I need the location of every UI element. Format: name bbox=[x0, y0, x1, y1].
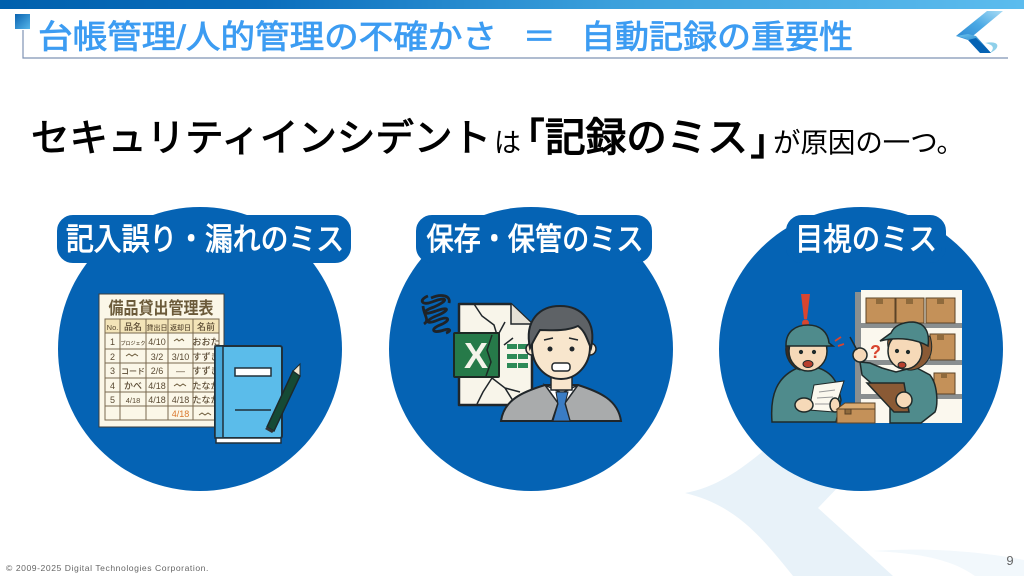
icon: ledger sheet: 貸出日 bbox=[146, 323, 168, 332]
icon: surprise ticks bbox=[835, 337, 844, 346]
icon: worker with clipboard bbox=[850, 322, 937, 423]
label: visual check errors: 目視のミス bbox=[795, 222, 937, 257]
icon: excel badge bbox=[454, 333, 499, 377]
icon: ledger sheet: たなか bbox=[192, 395, 220, 405]
icon: ledger sheet bbox=[99, 294, 224, 427]
headline: セキュリティインシデント bbox=[31, 117, 491, 160]
label: storage errors: 保存・保管のミス bbox=[426, 222, 644, 257]
icon: ledger sheet: 4 bbox=[110, 381, 115, 391]
icon: ledger sheet: 3 bbox=[110, 366, 115, 376]
icon: exclamation mark bbox=[801, 294, 810, 326]
icon: ledger sheet: かべ bbox=[124, 381, 142, 391]
panel: entry errors bbox=[58, 207, 349, 491]
icon: ledger sheet: No. bbox=[107, 323, 118, 332]
icon: pencil bbox=[265, 364, 300, 433]
icon: ledger sheet: ― bbox=[176, 366, 185, 376]
title equation: ＝ bbox=[523, 19, 556, 55]
icon: ledger sheet: 名前 bbox=[197, 321, 215, 332]
icon: ledger sheet: 4/18 bbox=[172, 395, 189, 405]
circle background bbox=[58, 207, 342, 491]
title frame rule bbox=[23, 30, 1008, 58]
icon: question marks: ? bbox=[870, 342, 881, 362]
logo bbox=[956, 11, 1003, 53]
icon: worried man bbox=[501, 306, 621, 421]
icon: ledger sheet: 備品貸出管理表 bbox=[108, 298, 214, 318]
icon: ledger sheet: プロジェク bbox=[120, 340, 146, 347]
icon: ledger sheet: 4/18 bbox=[148, 381, 166, 391]
icon: ledger sheet: 1 bbox=[110, 337, 115, 347]
headline bbox=[31, 116, 964, 164]
headline: は bbox=[494, 128, 521, 158]
headline: 記録のミス bbox=[545, 116, 748, 160]
icon: floor box bbox=[837, 403, 875, 423]
icon: ledger sheet: すずき bbox=[192, 366, 220, 376]
title marker square bbox=[15, 14, 30, 29]
top gradient bar bbox=[0, 0, 1024, 9]
icon: blue notebook bbox=[215, 346, 282, 443]
icon: ledger sheet: 5 bbox=[110, 395, 115, 405]
icon: scribble bbox=[422, 296, 450, 333]
circle background bbox=[389, 207, 673, 491]
circle background bbox=[719, 207, 1003, 491]
icon: ledger sheet: 3/2 bbox=[151, 352, 163, 362]
icon: excel badge: X bbox=[464, 335, 488, 376]
icon: ledger sheet: 4/18 bbox=[172, 409, 189, 419]
copyright: © 2009-2025 Digital Technologies Corporation. bbox=[6, 563, 209, 573]
icon: ledger sheet: 品名 bbox=[124, 321, 142, 332]
icon: ledger sheet: 2 bbox=[110, 352, 115, 362]
icon: ledger sheet: 3/10 bbox=[172, 352, 189, 362]
background watermark chevron bbox=[685, 360, 1024, 576]
headline: が原因の一つ。 bbox=[773, 127, 964, 158]
title: 台帳管理/人的管理の不確かさ bbox=[38, 19, 497, 55]
icon: cracked document bbox=[459, 304, 532, 405]
icon: ledger sheet: おおた bbox=[192, 337, 220, 347]
icon: ledger sheet: たなか bbox=[192, 381, 220, 391]
icon: ledger sheet: 4/18 bbox=[148, 395, 166, 405]
page number: 9 bbox=[1006, 553, 1014, 568]
icon: ledger sheet: 4/10 bbox=[148, 337, 166, 347]
icon: ledger sheet: 返却日 bbox=[170, 323, 191, 332]
headline: 「 bbox=[507, 117, 545, 159]
panel: storage errors bbox=[389, 207, 673, 491]
title right: 自動記録の重要性 bbox=[581, 19, 853, 55]
icon: ledger sheet: すずき bbox=[192, 352, 220, 362]
panel: visual check errors bbox=[719, 207, 1003, 491]
icon: ledger sheet: コード bbox=[121, 367, 145, 376]
icon: ledger sheet: 4/18 bbox=[126, 396, 140, 405]
icon: warehouse shelf bbox=[855, 290, 962, 423]
icon: ledger sheet: 2/6 bbox=[151, 366, 163, 376]
icon: worker with paper bbox=[772, 325, 844, 422]
label: entry errors: 記入誤り・漏れのミス bbox=[66, 222, 344, 257]
headline: 」 bbox=[750, 122, 788, 164]
